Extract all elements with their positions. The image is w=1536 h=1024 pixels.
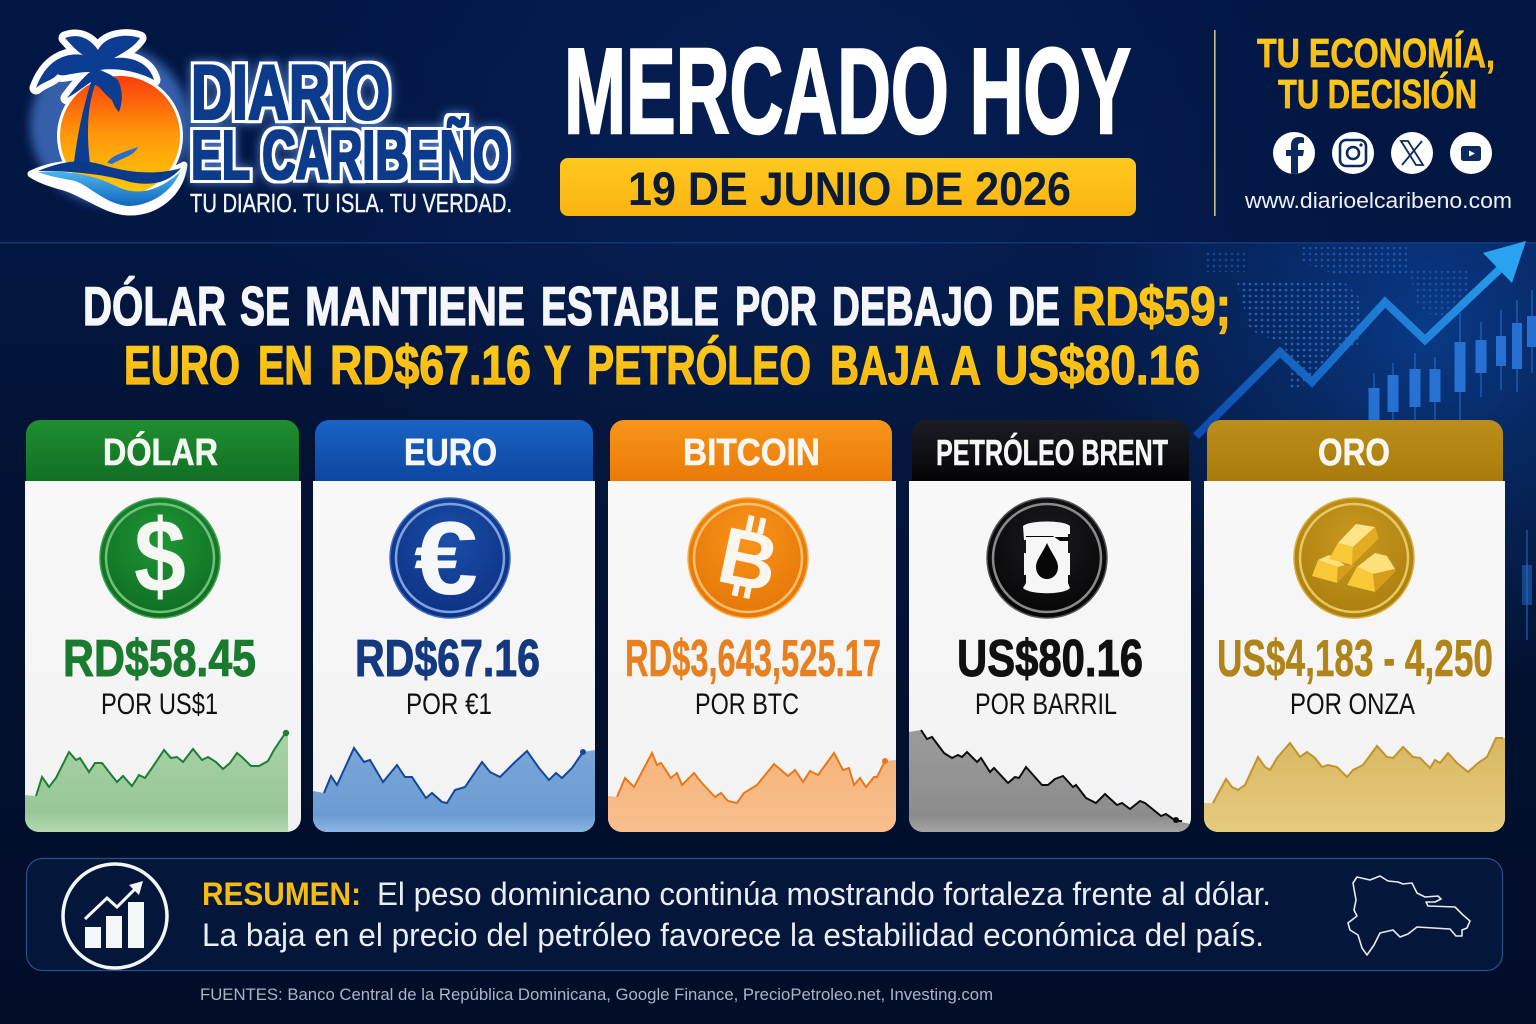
logo tagline: TU DIARIO. TU ISLA. TU VERDAD. xyxy=(190,188,512,218)
headline line 1: DÓLAR xyxy=(83,275,226,337)
headline line 2: A xyxy=(950,334,981,396)
icon: euro xyxy=(390,498,510,618)
title: MERCADO HOY xyxy=(564,23,1131,159)
logo wordmark xyxy=(191,48,509,194)
card header xyxy=(610,420,892,481)
panel: resumen xyxy=(26,858,1502,970)
icon: palm, sun and wave xyxy=(30,36,190,212)
card header: ORO xyxy=(1318,432,1390,474)
card header: PETRÓLEO BRENT xyxy=(936,431,1168,473)
unit: POR BTC xyxy=(695,688,799,721)
headline xyxy=(83,275,1231,396)
slogan xyxy=(1257,30,1495,117)
sparkline xyxy=(608,753,896,832)
icon: euro: € xyxy=(414,501,478,617)
card header xyxy=(912,420,1189,481)
card header: BITCOIN xyxy=(683,432,820,474)
icon: X xyxy=(1391,132,1433,174)
icon: youtube xyxy=(1450,132,1492,174)
headline line 1: SE xyxy=(240,275,290,337)
logo: Diario El Caribeño xyxy=(30,36,512,218)
headline line 1: POR xyxy=(735,275,817,337)
card header: EURO xyxy=(404,432,497,474)
panel: oro xyxy=(1204,420,1505,832)
headline line 1 xyxy=(83,275,1060,337)
price: RD$67.16 xyxy=(355,630,540,688)
headline line 1: DE xyxy=(1008,275,1060,337)
logo wordmark: EL CARIBEÑO xyxy=(191,116,509,194)
icon: facebook xyxy=(1273,132,1315,176)
icon: bitcoin xyxy=(688,498,808,618)
candlesticks xyxy=(1368,290,1536,640)
sparkline xyxy=(25,730,289,832)
sparkline xyxy=(1204,738,1505,832)
icon: dominican republic map xyxy=(1348,876,1470,955)
headline line 2 xyxy=(124,334,1200,396)
card header xyxy=(1207,420,1503,481)
headline line 2: EN xyxy=(258,334,313,396)
icon: growth chart xyxy=(63,864,167,968)
panel: euro xyxy=(313,420,595,832)
panel: bitcoin xyxy=(608,420,896,832)
sparkline xyxy=(313,748,595,832)
icon: gold bars xyxy=(1294,498,1414,618)
card header xyxy=(315,420,593,481)
dotted world map xyxy=(1206,247,1470,390)
card header xyxy=(26,420,299,481)
icon: bitcoin: B xyxy=(711,510,786,609)
headline line 2: Y xyxy=(544,334,571,396)
social icons xyxy=(1273,132,1492,176)
headline line 1: DEBAJO xyxy=(832,275,993,337)
panel: petróleo brent xyxy=(909,420,1191,832)
headline line 2: US$80.16 xyxy=(995,334,1200,396)
headline highlight: RD$59; xyxy=(1072,275,1231,337)
unit: POR €1 xyxy=(406,688,492,721)
sparkline xyxy=(909,730,1191,832)
headline line 1: ESTABLE xyxy=(541,275,719,337)
website: www.diarioelcaribeno.com xyxy=(1244,188,1512,213)
price: RD$3,643,525.17 xyxy=(625,630,881,688)
price: RD$58.45 xyxy=(63,630,256,688)
slogan: TU DECISIÓN xyxy=(1278,71,1477,117)
headline line 2: BAJA xyxy=(830,334,939,396)
icon: dollar: $ xyxy=(134,499,186,615)
summary line 2: La baja en el precio del petróleo favorece la estabilidad económica del país. xyxy=(202,917,1264,953)
headline line 1: MANTIENE xyxy=(305,275,525,337)
icon: instagram xyxy=(1332,132,1374,174)
logo wordmark: DIARIO xyxy=(191,48,390,136)
icon: oil barrel xyxy=(987,498,1107,618)
date pill: 19 DE JUNIO DE 2026 xyxy=(628,162,1071,215)
background market chart decoration xyxy=(1196,241,1536,640)
panel: dólar xyxy=(25,420,301,832)
icon: dollar xyxy=(100,498,220,618)
rising arrow xyxy=(1196,241,1526,436)
card header: DÓLAR xyxy=(103,430,218,474)
price: US$80.16 xyxy=(957,630,1143,688)
summary text xyxy=(202,876,1271,953)
headline line 2: PETRÓLEO xyxy=(587,334,811,396)
summary label: RESUMEN: xyxy=(202,876,361,912)
headline line 2: RD$67.16 xyxy=(330,334,531,396)
summary line 1: El peso dominicano continúa mostrando fortaleza frente al dólar. xyxy=(377,876,1271,912)
unit: POR BARRIL xyxy=(975,688,1117,721)
unit: POR US$1 xyxy=(101,688,218,721)
headline line 2: EURO xyxy=(124,334,240,396)
unit: POR ONZA xyxy=(1290,688,1415,721)
sources: FUENTES: Banco Central de la República Dominicana, Google Finance, PrecioPetroleo.net, Investing.com xyxy=(200,986,993,1004)
